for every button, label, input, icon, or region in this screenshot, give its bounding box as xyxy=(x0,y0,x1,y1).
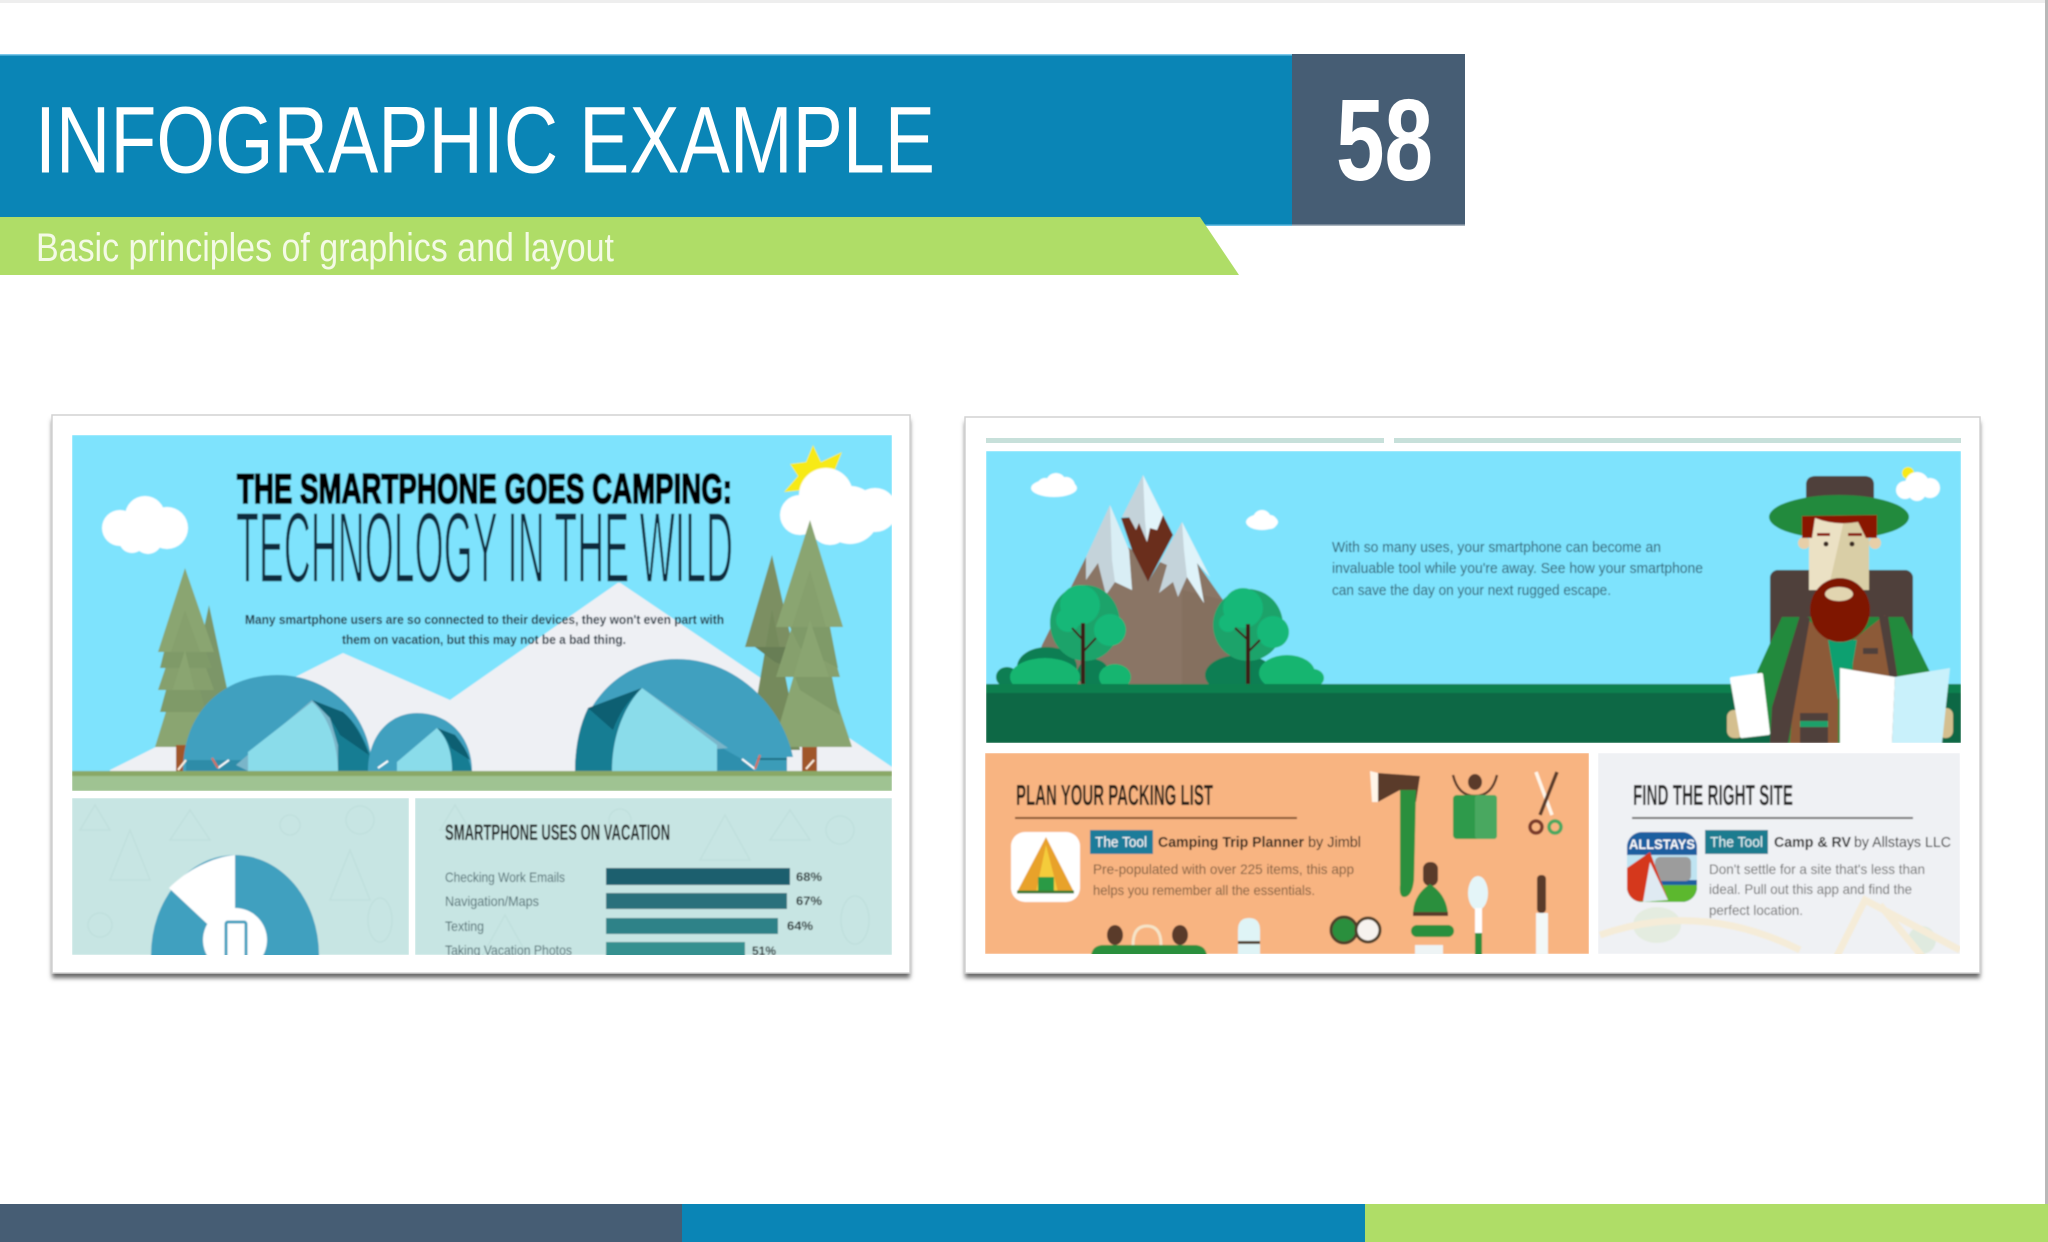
hat xyxy=(1769,476,1909,539)
hands xyxy=(1727,708,1953,738)
mountain xyxy=(1030,475,1235,684)
panel: left example card: TECHNOLOGY IN THE WILD xyxy=(236,492,733,604)
intro text xyxy=(1332,539,1703,599)
title bar xyxy=(0,54,1292,226)
icon: binoculars bag xyxy=(1091,925,1207,958)
tool name: by Jimbl xyxy=(1308,835,1361,851)
bar row: checking work emails: Checking Work Emails xyxy=(445,869,565,885)
icon: left cloud xyxy=(102,496,188,554)
hiker character xyxy=(1727,476,1953,743)
brows and eyes xyxy=(1817,533,1862,546)
description: helps you remember all the essentials. xyxy=(1093,882,1315,898)
tent stakes xyxy=(178,755,814,770)
right pine trees xyxy=(745,520,852,771)
intro text: invaluable tool while you're away. See how your smartphone xyxy=(1332,560,1703,577)
tool name: Camp & RV xyxy=(1774,835,1851,851)
beard xyxy=(1810,578,1870,642)
bar row: vacation photos xyxy=(444,941,777,955)
face xyxy=(1798,537,1810,549)
intro text: With so many uses, your smartphone can become an xyxy=(1332,539,1661,556)
bar row: navigation: Navigation/Maps xyxy=(445,893,539,909)
ground xyxy=(986,684,1961,743)
phone xyxy=(1732,675,1768,736)
chart heading: SMARTPHONE USES ON VACATION xyxy=(445,820,670,845)
description: Don't settle for a site that's less than xyxy=(1709,861,1925,877)
tool tag xyxy=(1090,830,1153,854)
icon: thermos xyxy=(1238,918,1260,955)
right tent xyxy=(575,659,793,771)
bar row: checking work emails xyxy=(445,868,822,885)
tool name: by Allstays LLC xyxy=(1854,835,1951,851)
subtitle ribbon: Basic principles of graphics and layout xyxy=(36,226,614,270)
panel: smartphone uses bar chart xyxy=(415,798,892,960)
icon: tipi app xyxy=(1011,832,1080,902)
panel: donut chart area xyxy=(72,798,409,955)
icon: lantern xyxy=(1411,862,1454,957)
left tent xyxy=(183,675,372,771)
left tree and bushes xyxy=(996,585,1131,696)
heading: FIND THE RIGHT SITE xyxy=(1633,780,1793,812)
description xyxy=(1709,861,1925,918)
subtitle ribbon xyxy=(0,217,1239,275)
icon: small clouds xyxy=(1031,473,1278,530)
bar row: vacation photos: 51% xyxy=(752,944,776,958)
map background xyxy=(1600,900,1960,960)
small tent xyxy=(368,713,472,771)
description xyxy=(1093,861,1354,898)
slide number box: 58 xyxy=(1336,75,1433,205)
vest pocket xyxy=(1800,713,1828,743)
panel: plan your packing list xyxy=(985,753,1589,958)
jacket xyxy=(1757,617,1930,743)
icon: sun xyxy=(784,444,848,493)
bar row: navigation xyxy=(445,893,822,909)
footer colour bar xyxy=(0,1204,2048,1242)
tool tag: The Tool xyxy=(1095,834,1147,851)
bar row: checking work emails: 68% xyxy=(796,870,822,884)
icon: right cloud xyxy=(780,468,897,545)
intro text: can save the day on your next rugged escape. xyxy=(1332,582,1611,599)
intro text: Many smartphone users are so connected to their devices, they won't even part with xyxy=(245,612,724,627)
tool tag: The Tool xyxy=(1710,834,1763,851)
bar row: texting xyxy=(445,918,813,934)
tool name: Camping Trip Planner xyxy=(1158,835,1304,851)
description: perfect location. xyxy=(1709,902,1803,918)
tool name xyxy=(1774,835,1951,851)
title: the smartphone goes camping: THE SMARTPHONE GOES CAMPING: xyxy=(237,465,732,512)
icon: allstays app xyxy=(1627,832,1697,902)
grass strip xyxy=(72,771,892,791)
panel: find the right site xyxy=(1598,753,1960,960)
bar row: texting: 64% xyxy=(787,919,813,933)
hero illustration: camping scene xyxy=(72,435,897,791)
icon: knife xyxy=(1536,875,1548,955)
slide number box xyxy=(1292,54,1465,226)
icon: phone xyxy=(226,922,246,958)
header banner xyxy=(0,54,1465,275)
bar row: vacation photos: Taking Vacation Photos xyxy=(445,942,572,958)
icon: spoon xyxy=(1468,876,1488,955)
icon: compass xyxy=(1331,917,1380,943)
icon: scissors xyxy=(1530,772,1561,833)
heading: PLAN YOUR PACKING LIST xyxy=(1016,780,1213,812)
panel: right example card xyxy=(965,417,1980,978)
vest xyxy=(1790,615,1838,743)
bar row: texting: Texting xyxy=(445,918,484,934)
snowy mountains xyxy=(110,582,892,772)
intro text: them on vacation, but this may not be a bad thing. xyxy=(342,632,626,647)
donut chart xyxy=(150,854,320,955)
backpack xyxy=(1769,569,1914,644)
hair xyxy=(1802,515,1877,538)
left pine trees xyxy=(155,568,232,771)
panel: left example card xyxy=(48,414,914,982)
description: ideal. Pull out this app and find the xyxy=(1709,881,1912,897)
hero illustration: hiker scene xyxy=(986,451,1961,743)
icon: axe xyxy=(1370,771,1420,897)
right tree and bushes xyxy=(1205,588,1324,695)
description: Pre-populated with over 225 items, this app xyxy=(1093,861,1354,877)
bar row: navigation: 67% xyxy=(796,894,822,908)
tool tag xyxy=(1705,830,1768,854)
icon: sun and cloud xyxy=(1896,467,1940,501)
intro text xyxy=(245,612,724,647)
title text: INFOGRAPHIC EXAMPLE xyxy=(35,88,935,194)
map xyxy=(1840,668,1950,743)
icon: allstays app: ALLSTAYS xyxy=(1629,836,1695,852)
icon: camp stove xyxy=(1453,774,1497,839)
